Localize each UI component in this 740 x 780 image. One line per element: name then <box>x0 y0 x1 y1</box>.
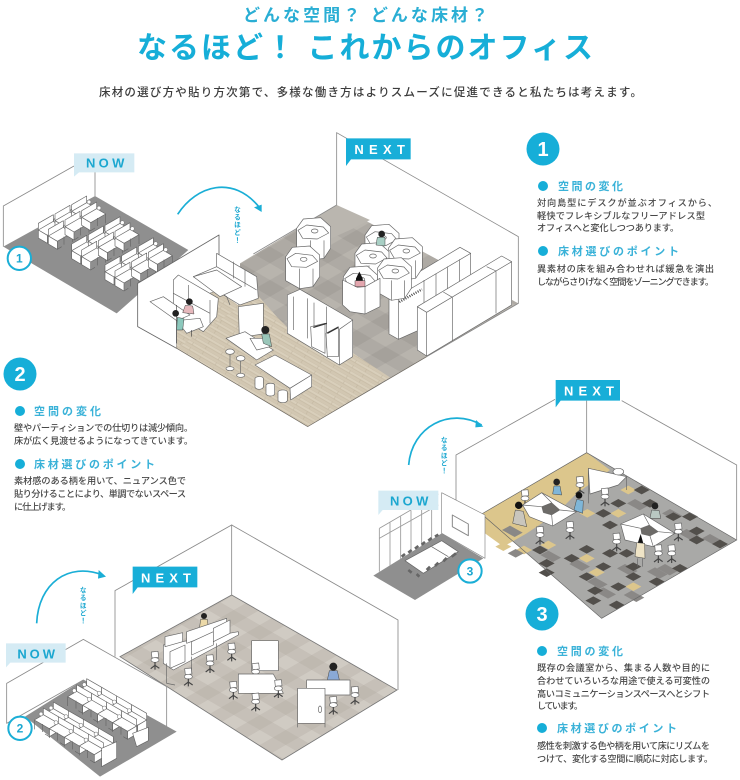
description: 異素材の床を組み合わせれば緩急を演出 <box>537 263 714 274</box>
bullet heading <box>538 179 623 193</box>
hex table cluster B <box>612 514 683 563</box>
bullet heading: 空間の変化 <box>558 179 623 193</box>
なるほど label 3: なるほど！ <box>439 437 447 475</box>
bullet heading <box>15 404 101 418</box>
description <box>537 662 710 711</box>
walls <box>456 399 737 540</box>
description <box>537 263 714 287</box>
hex table cluster A <box>521 476 584 545</box>
description <box>14 422 193 446</box>
scene 1: next office <box>177 133 518 427</box>
lounge people <box>172 298 194 330</box>
description: しています。 <box>537 701 583 711</box>
number badge 1: 1 <box>537 139 549 161</box>
description: オフィスへと変化しつつあります。 <box>537 222 679 233</box>
bullet heading <box>537 644 623 658</box>
description: 壁やパーティションでの仕切りは減少傾向。 <box>14 422 193 433</box>
badge 1: 1 <box>16 252 23 266</box>
counter and high table <box>226 326 312 400</box>
heading: subtitle: どんな空間？ どんな床材？ <box>243 6 488 25</box>
floor: carpet and wood <box>177 205 518 427</box>
NOW label: NOW <box>17 646 56 661</box>
lockers and storage <box>389 247 512 356</box>
floor: carpet <box>482 453 737 618</box>
description: 感性を刺激する色や柄を用いて床にリズムを <box>537 740 710 751</box>
description: 床が広く見渡せるようになってきています。 <box>14 435 193 446</box>
conference table <box>402 535 458 577</box>
NEXT label: NEXT <box>564 384 614 399</box>
lounge partition walls <box>138 235 219 348</box>
bullet heading: 床材選びのポイント <box>558 244 679 258</box>
arrow 3 <box>409 418 483 465</box>
scene 3 <box>373 380 737 618</box>
people at table A <box>513 479 583 527</box>
NEXT label <box>556 380 620 407</box>
description <box>14 475 186 512</box>
description: 既存の会議室から、集まる人数や目的に <box>537 662 710 673</box>
floor edge <box>482 453 737 618</box>
badge 1 <box>8 247 31 270</box>
NEXT label 1 <box>346 138 411 166</box>
hexagonal booths <box>286 218 422 314</box>
badge 2: 2 <box>17 722 24 736</box>
NOW label <box>6 643 66 667</box>
panel: text 3 <box>526 598 713 764</box>
NEXT label: NEXT <box>141 571 191 586</box>
badge 3: 3 <box>467 564 474 578</box>
arrow 1 <box>178 187 262 214</box>
panel: text 1 <box>526 132 717 287</box>
NOW label <box>74 153 134 177</box>
NOW label: NOW <box>86 156 125 171</box>
number badge 2: 2 <box>14 364 26 386</box>
なるほど label 1: なるほど！ <box>232 206 241 244</box>
number badge 3 <box>526 598 558 630</box>
NOW walls <box>3 166 95 247</box>
NEXT walls <box>115 525 398 690</box>
wood floor inside the lounge <box>177 290 240 348</box>
room walls <box>337 133 518 357</box>
stools <box>226 349 287 403</box>
people at table B <box>635 503 661 567</box>
NOW cubicle clusters <box>34 679 148 767</box>
meeting table with whiteboard <box>229 641 283 711</box>
bench desks <box>151 613 238 686</box>
description <box>537 740 713 764</box>
description: しながらさりげなく空間をゾーニングできます。 <box>537 276 714 287</box>
floor: gold zone <box>482 453 610 547</box>
description: に仕上げます。 <box>14 501 71 512</box>
number badge 2 <box>4 358 36 390</box>
description: つけて、変化する空間に順応に対応します。 <box>537 753 713 764</box>
description: 合わせていろいろな用途で使える可変性の <box>537 675 710 686</box>
NOW cubicle clusters <box>38 196 172 291</box>
badge 2 <box>8 717 32 740</box>
description: 高いコミュニケーションスペースへとシフト <box>537 688 710 699</box>
triangular partition <box>588 468 627 506</box>
number badge 3: 3 <box>536 604 548 626</box>
panel: text 2 <box>4 358 193 512</box>
NOW floor <box>3 196 188 313</box>
intro text: 床材の選び方や貼り方次第で、多様な働き方はよりスムーズに促進できると私たちは考えます。 <box>99 85 642 99</box>
scene 1: lounge furniture and NOW room <box>3 153 312 403</box>
bullet heading: 床材選びのポイント <box>34 457 155 471</box>
standing partition <box>238 303 263 337</box>
NEXT label 1: NEXT <box>354 142 405 157</box>
glass wall <box>379 494 438 572</box>
cabinet with copier <box>287 289 353 365</box>
NOW partition with screen <box>442 493 485 558</box>
meeting table with person and board <box>298 663 359 727</box>
description: 対向島型にデスクが並ぶオフィスから、 <box>537 197 717 208</box>
description: 素材感のある柄を用いて、ニュアンス色で <box>14 475 186 486</box>
number badge 1 <box>526 132 560 166</box>
NOW floor <box>373 533 483 600</box>
NOW walls <box>7 639 167 727</box>
NOW floor <box>25 680 177 777</box>
scene 2 <box>6 525 398 777</box>
title: なるほど！ これからのオフィス <box>137 32 593 65</box>
NOW label <box>378 491 438 515</box>
bullet heading: 床材選びのポイント <box>557 721 677 735</box>
NEXT floor <box>120 595 397 760</box>
carpet tiles <box>495 486 728 609</box>
bullet heading: 空間の変化 <box>34 404 101 418</box>
arrow 2 <box>37 570 106 623</box>
description: 軽快でフレキシブルなフリーアドレス型 <box>537 210 705 221</box>
NEXT label <box>133 567 197 594</box>
なるほど label 2: なるほど！ <box>78 587 86 625</box>
sofa booths <box>150 253 258 343</box>
bullet heading: 空間の変化 <box>557 644 623 658</box>
badge 3 <box>458 559 482 583</box>
description: 貼り分けることにより、単調でないスペース <box>14 488 186 499</box>
description <box>537 197 717 233</box>
NOW label: NOW <box>390 494 429 509</box>
